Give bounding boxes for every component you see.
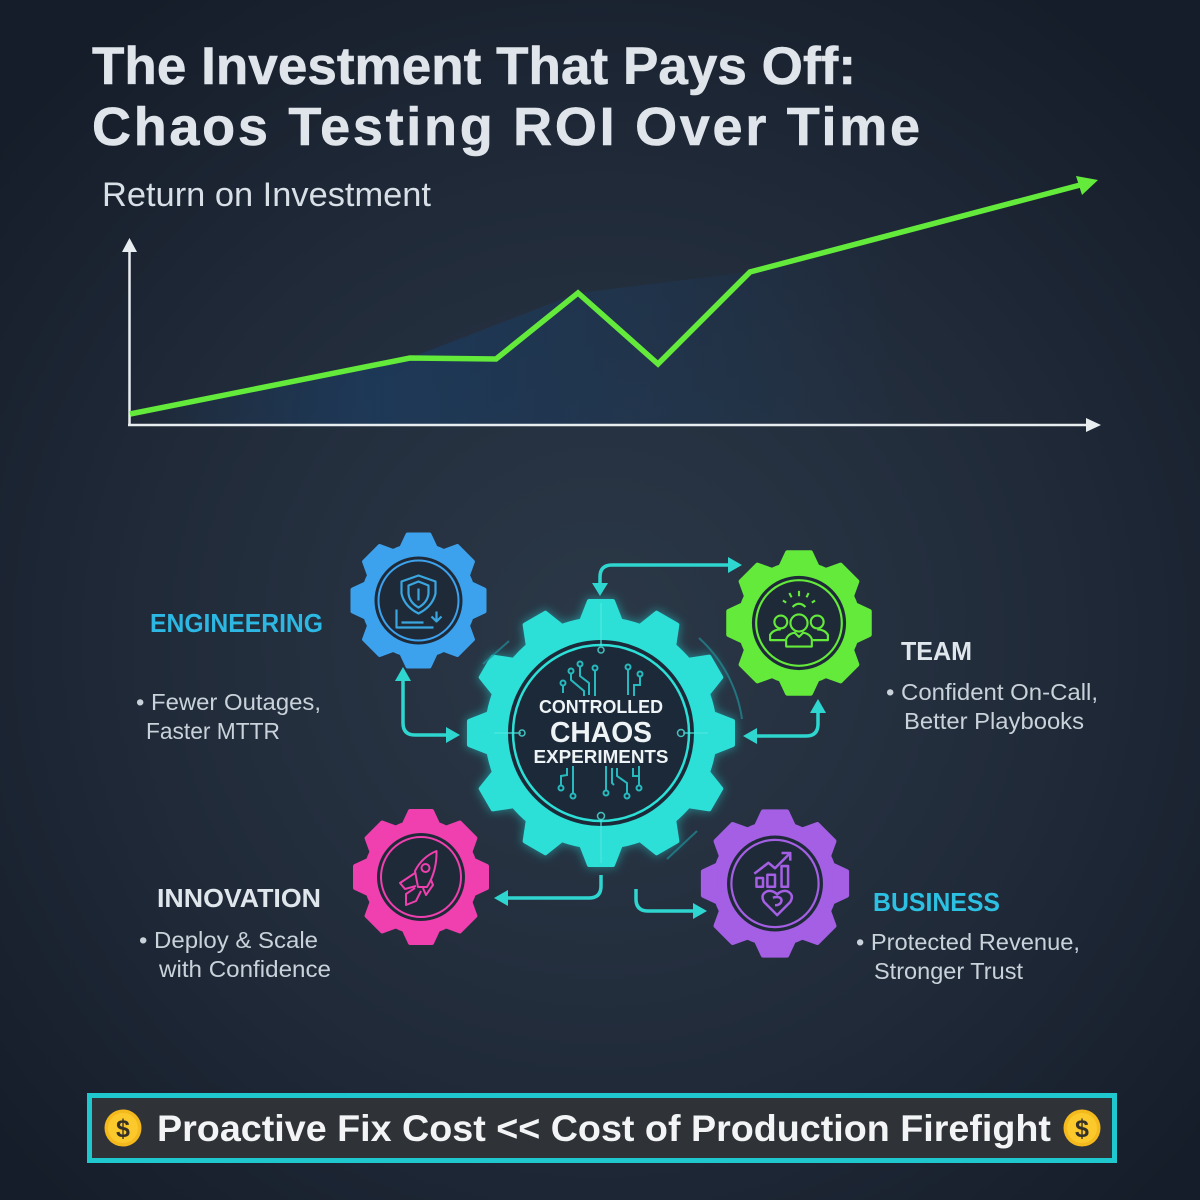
chart axes [122,238,1101,432]
banner frame [90,1096,1114,1160]
connector arrows [395,557,826,919]
gear body [352,534,484,666]
central gear: controlled chaos experiments [469,601,742,865]
text block: team: • Confident On-Call, [886,679,1098,705]
hub ring [381,837,461,917]
hub ring [756,580,842,666]
gear body [728,552,870,694]
hub ring [731,840,819,927]
title: The Investment That Pays Off: [92,37,856,96]
icon: team [770,591,828,647]
text block: business: BUSINESS [873,887,1000,917]
title [92,37,920,157]
text block: innovation: with Confidence [158,956,331,982]
gear body [469,601,733,865]
text block: innovation [139,883,331,982]
text block: engineering: ENGINEERING [150,608,323,638]
text block: business [856,887,1080,984]
engineering gear [352,534,484,666]
gear hub [752,576,846,670]
text block: team: TEAM [901,636,972,666]
chart area fill [130,232,900,424]
gear label: CONTROLLED [539,696,663,717]
circuit traces [558,662,642,798]
gear glow [469,601,733,865]
text block: business: • Protected Revenue, [856,929,1080,955]
gear hub [508,640,694,826]
gear body [355,811,487,943]
business gear [703,812,847,955]
hub crosshair ticks [494,603,708,863]
text block: engineering: • Fewer Outages, [136,689,321,715]
text block: engineering: Faster MTTR [146,718,280,744]
line chart: return on investment [102,176,1101,432]
arrow: core to innovation [494,875,601,906]
text block: innovation: • Deploy & Scale [139,927,318,953]
icon: growth chart and heart [754,853,792,915]
icon: left coin [104,1110,142,1146]
banner text: Proactive Fix Cost << Cost of Production Firefight [157,1108,1051,1149]
gear label: EXPERIMENTS [534,746,668,767]
text block: team: Better Playbooks [904,708,1084,734]
hub ring [513,645,689,821]
arrow: core to engineering [395,667,460,743]
gear label: CHAOS [550,717,652,749]
title: Chaos Testing ROI Over Time [92,97,920,157]
chart heading: Return on Investment [102,176,431,214]
gear body [703,812,847,955]
hub ring [378,560,458,640]
icon: right coin [1064,1110,1100,1146]
gear label [534,696,668,767]
icon: left coin: $ [116,1115,130,1143]
text block: engineering [136,608,323,744]
team gear [728,552,870,694]
icon: shield and chart [396,576,442,628]
text block: innovation: INNOVATION [157,883,321,913]
icon: right coin: $ [1075,1115,1089,1143]
innovation gear [355,811,487,943]
callout banner: cost comparison [90,1096,1114,1160]
orbit accents [483,638,742,859]
text block: team [886,636,1098,734]
gear hub [727,836,823,931]
arrow: core to business [636,889,707,919]
ROI trend line with arrow [130,176,1098,414]
arrow: team to core [743,699,826,744]
icon: rocket [400,851,437,905]
gear hub [374,556,462,644]
gear hub [377,833,465,921]
arrow: core to team [592,557,742,596]
text block: business: Stronger Trust [874,958,1023,984]
